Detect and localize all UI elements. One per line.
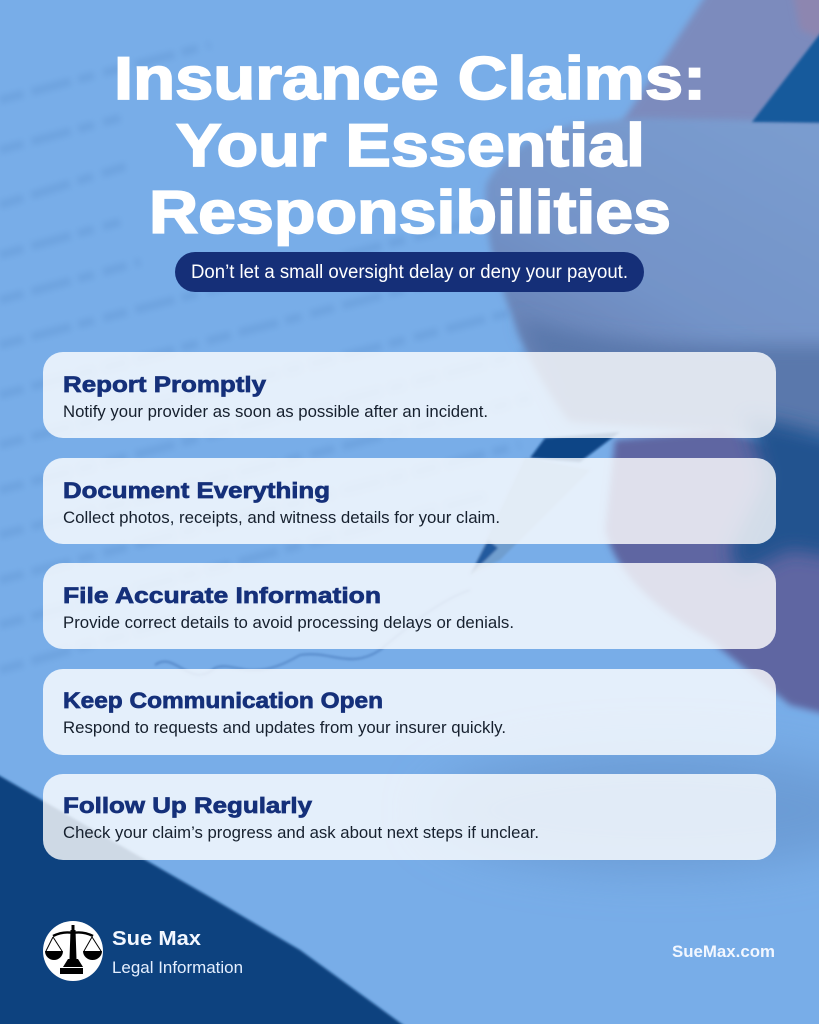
- document text lines: [0, 45, 530, 670]
- card: File Accurate Information: Provide correct details to avoid processing delays or denials.: [63, 614, 514, 632]
- card: Report Promptly: [43, 352, 776, 438]
- subtitle pill: Don’t let a small oversight delay or deny your payout.: [191, 262, 628, 283]
- icon: scales of justice logo: [43, 921, 103, 981]
- card: Report Promptly: Notify your provider as soon as possible after an incident.: [63, 403, 488, 421]
- dark pen barrel on right: [730, 415, 819, 575]
- hand: finger: [620, 0, 819, 130]
- signature stroke: [155, 590, 470, 675]
- card: Follow Up Regularly: [43, 774, 776, 860]
- brand tagline: Legal Information: [112, 959, 243, 977]
- hand: fingertip pink shade: [790, 0, 819, 50]
- card: Document Everything: Collect photos, receipts, and witness details for your claim.: [63, 509, 500, 527]
- card: Document Everything: [43, 458, 776, 544]
- lower right shade: [430, 750, 819, 870]
- subtitle pill: [175, 252, 644, 292]
- card: Document Everything: Document Everything: [63, 478, 330, 503]
- title: [114, 45, 706, 246]
- dark shadow corner: [0, 760, 410, 1024]
- card: Keep Communication Open: Keep Communication Open: [63, 688, 383, 713]
- title: Your Essential: [176, 112, 645, 179]
- pen nib and body: [470, 432, 620, 575]
- card: Keep Communication Open: [43, 669, 776, 755]
- website: SueMax.com: [672, 943, 775, 961]
- card: File Accurate Information: File Accurate Information: [63, 583, 381, 608]
- card: Follow Up Regularly: Check your claim’s progress and ask about next steps if unclear.: [63, 824, 539, 842]
- title: Responsibilities: [149, 179, 671, 246]
- hand: main palm: [486, 118, 819, 440]
- dark sleeve: [752, 0, 819, 123]
- brand name: Sue Max: [112, 927, 202, 950]
- title: Insurance Claims:: [114, 45, 706, 112]
- card: File Accurate Information: [43, 563, 776, 649]
- card: Follow Up Regularly: Follow Up Regularly: [63, 793, 313, 818]
- card: Keep Communication Open: Respond to requests and updates from your insurer quickly.: [63, 719, 506, 737]
- card: Report Promptly: Report Promptly: [63, 372, 267, 397]
- hand: purple fingers behind cards: [605, 430, 819, 720]
- hand: shadowed lower edge: [520, 320, 819, 440]
